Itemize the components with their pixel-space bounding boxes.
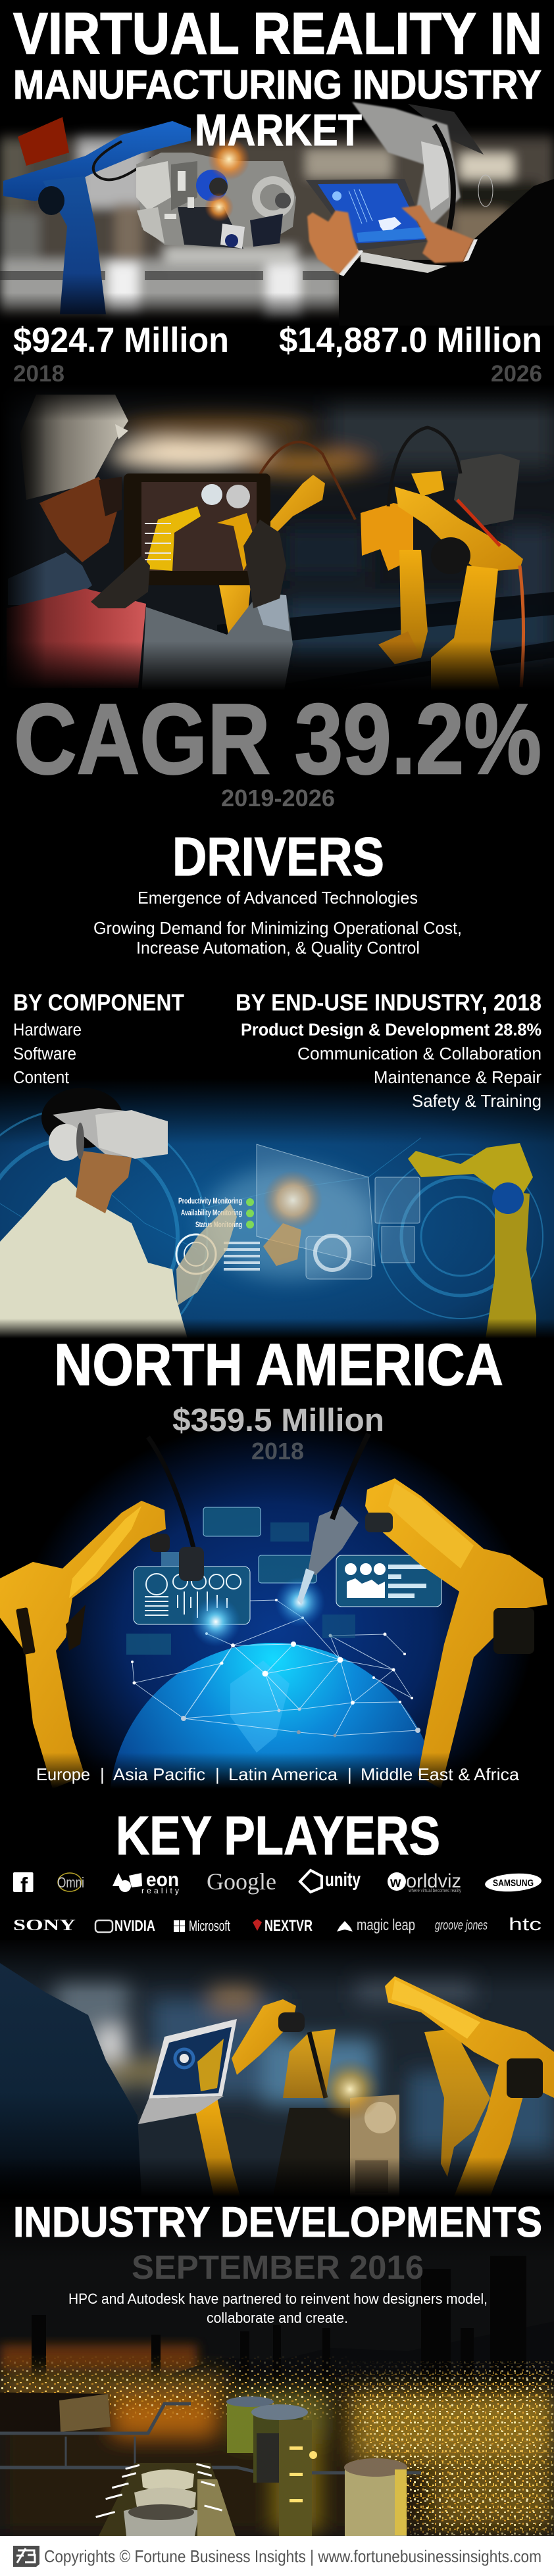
logo: WorldViz	[388, 1870, 461, 1893]
welding sparks	[318, 2058, 382, 2121]
man head and neck	[76, 1151, 132, 1213]
development text: collaborate and create.	[207, 2310, 348, 2326]
heading: KEY PLAYERS: KEY PLAYERS	[116, 1805, 440, 1866]
raised hand	[176, 1203, 237, 1305]
logo: EON Reality: reality	[141, 1886, 179, 1895]
left yellow robot	[0, 1437, 204, 1789]
list: end-use industries: Product Design & Development 28.8%	[241, 1021, 541, 1039]
hud panels: small	[126, 1507, 355, 1655]
tablet in hand	[124, 474, 270, 585]
top fade	[1, 129, 551, 149]
photo: welding robots over digital globe	[0, 1421, 554, 1972]
welding sparks	[205, 138, 250, 222]
bottom fade	[0, 2157, 554, 2197]
pipe rack	[0, 2404, 421, 2473]
logo: NVIDIA: NVIDIA	[114, 1917, 155, 1934]
mountains	[171, 2321, 554, 2400]
stat label: North America year: 2018	[251, 1438, 304, 1465]
logo: Sony: SONY	[13, 1917, 76, 1934]
list: components	[13, 1021, 82, 1087]
bottom fade	[0, 641, 554, 691]
logo: WorldViz: orldviz	[406, 1870, 461, 1892]
large cylinder tank	[344, 2458, 407, 2536]
development text	[68, 2291, 488, 2326]
stat: 2018 value: $924.7 Million	[13, 321, 229, 360]
logo: Samsung: SAMSUNG	[493, 1878, 534, 1889]
platform under stacks	[99, 2463, 236, 2536]
stat: North America value: $359.5 Million	[172, 1403, 384, 1438]
white robot arm, back right	[352, 102, 493, 237]
yellow arm front left	[194, 1999, 326, 2197]
logo: Facebook: f	[20, 1873, 28, 1897]
light glows	[191, 1577, 325, 1647]
right yellow robot	[297, 1434, 547, 1789]
logo: NextVR	[253, 1917, 313, 1935]
list: components: Hardware	[13, 1021, 82, 1039]
engine block	[136, 153, 296, 249]
blue robot arm	[3, 121, 191, 314]
list: other regions: |	[347, 1764, 352, 1784]
hologram panels	[257, 1144, 420, 1279]
white vent stacks	[124, 2469, 236, 2536]
hologram labels: Availability Monitoring	[181, 1208, 242, 1217]
red box	[18, 117, 69, 166]
globe	[109, 1643, 438, 1972]
hud panel: bars	[336, 1555, 441, 1607]
icon: Fortune Business Insights logo	[13, 2546, 39, 2567]
footer bar	[0, 2536, 554, 2576]
date: September 2016: SEPTEMBER 2016	[132, 2248, 424, 2286]
logo: Facebook	[13, 1872, 33, 1897]
list: end-use industries	[241, 1021, 542, 1111]
refinery towers	[32, 2256, 526, 2407]
development text: HPC and Autodesk have partnered to reinvent how designers model,	[68, 2291, 488, 2307]
photo: refinery at night	[0, 2197, 554, 2536]
hair	[41, 1088, 123, 1148]
vr headset	[49, 1108, 168, 1161]
hologram labels: Productivity Monitoring	[178, 1196, 242, 1205]
list: other regions: |	[100, 1764, 105, 1784]
photo: factory with blue robot, engine and tablet	[0, 92, 554, 326]
stat: 2026 value: $14,887.0 Million	[279, 321, 542, 360]
top fade	[0, 385, 554, 421]
list: other regions: Latin America	[228, 1764, 338, 1784]
logo: Omni: Omni	[57, 1874, 84, 1891]
list: components: Software	[13, 1045, 76, 1063]
network nodes	[131, 1599, 420, 1738]
white shirt	[339, 239, 478, 276]
list: end-use industries: Maintenance & Repair	[374, 1069, 542, 1087]
list: end-use industries: Safety & Training	[412, 1092, 541, 1111]
laptop keyboard	[138, 2096, 224, 2124]
hologram glow	[204, 1167, 375, 1279]
yellow robot	[408, 1143, 536, 1338]
office building	[0, 2393, 111, 2432]
background robots	[283, 2029, 490, 2177]
list: other regions: Middle East & Africa	[361, 1764, 520, 1784]
plant light points	[0, 2354, 554, 2536]
laptop	[149, 2019, 237, 2099]
other hand	[263, 1223, 301, 1266]
heading: MARKET: MARKET	[195, 105, 362, 155]
logo: Microsoft: Microsoft	[189, 1918, 230, 1934]
bottom fade	[0, 1319, 554, 1338]
logo: Magic Leap: magic leap	[357, 1916, 415, 1934]
tablet	[306, 179, 429, 251]
logo: Magic Leap	[337, 1916, 415, 1934]
logo: Unity	[300, 1869, 361, 1892]
driver 1: Emergence of Advanced Technologies	[138, 888, 418, 908]
logo: WorldViz: where virtual becomes reality	[408, 1889, 461, 1893]
bottom fade	[0, 1753, 554, 1789]
logo: HTC: htc	[509, 1914, 541, 1934]
logo: Samsung	[484, 1872, 542, 1893]
logo: Groove Jones: groove jones	[435, 1918, 488, 1933]
network lines	[132, 1600, 418, 1736]
horizon glow	[0, 2345, 197, 2371]
left fade	[0, 396, 43, 685]
welding machine	[273, 2095, 399, 2197]
list: other regions: Asia Pacific	[113, 1764, 205, 1784]
hud panel: gauges	[134, 1567, 250, 1624]
stat label: 2026: 2026	[491, 361, 542, 387]
yellow arm front right	[385, 1976, 554, 2197]
logo: EON Reality: eon	[146, 1869, 179, 1891]
heading: by end-use industry: BY END-USE INDUSTRY, 2018	[236, 990, 541, 1015]
suit of businessman	[339, 179, 554, 326]
list: end-use industries: Communication & Collaboration	[297, 1045, 541, 1063]
heading: by component: BY COMPONENT	[13, 990, 184, 1015]
tower lights	[290, 2446, 317, 2502]
bottom fade	[0, 294, 339, 326]
hologram labels: Status Monitoring	[195, 1220, 242, 1229]
logo: Unity: unity	[325, 1869, 361, 1891]
logo: WorldViz: w	[390, 1875, 401, 1890]
yellow robots	[219, 427, 524, 697]
logo: NVIDIA	[95, 1917, 155, 1934]
logo: NextVR: NEXTVR	[264, 1917, 313, 1935]
stairs tower	[279, 2420, 312, 2536]
photo: engineer with laptop and welding robots	[0, 1937, 554, 2197]
hologram labels	[178, 1196, 254, 1229]
top fade	[0, 1937, 554, 1993]
dial gauge	[176, 1234, 349, 1274]
photo: man in VR headset with hologram panels	[0, 1084, 554, 1338]
list: other regions: Europe	[36, 1764, 90, 1784]
top fade	[0, 1079, 554, 1144]
plant base glow	[0, 2374, 554, 2536]
list: other regions	[36, 1764, 520, 1784]
hud rings	[0, 1113, 543, 1319]
gloves	[91, 520, 286, 608]
logo: Microsoft	[174, 1918, 230, 1934]
heading: DRIVERS: DRIVERS	[172, 826, 384, 887]
hands	[307, 205, 474, 274]
storage tanks	[226, 2396, 308, 2483]
man shirt	[0, 1177, 188, 1338]
driver 2: Growing Demand for Minimizing Operational Cost,	[93, 918, 462, 938]
list: components: Content	[13, 1069, 69, 1087]
logo: Google: Google	[207, 1868, 276, 1895]
heading: NORTH AMERICA: NORTH AMERICA	[54, 1332, 503, 1398]
small lamp highlights	[95, 2463, 222, 2518]
logo: EON Reality	[113, 1869, 179, 1895]
stat label: forecast period: 2019-2026	[221, 785, 335, 812]
rails	[217, 592, 554, 669]
stat label: 2018: 2018	[13, 361, 64, 387]
engineer	[0, 1963, 141, 2197]
photo: worker with tablet and yellow robots	[0, 385, 554, 700]
worker	[7, 395, 293, 697]
table detail	[0, 271, 339, 280]
driver 2	[93, 918, 462, 958]
list: other regions: |	[215, 1764, 220, 1784]
driver 2: Increase Automation, & Quality Control	[136, 938, 420, 958]
